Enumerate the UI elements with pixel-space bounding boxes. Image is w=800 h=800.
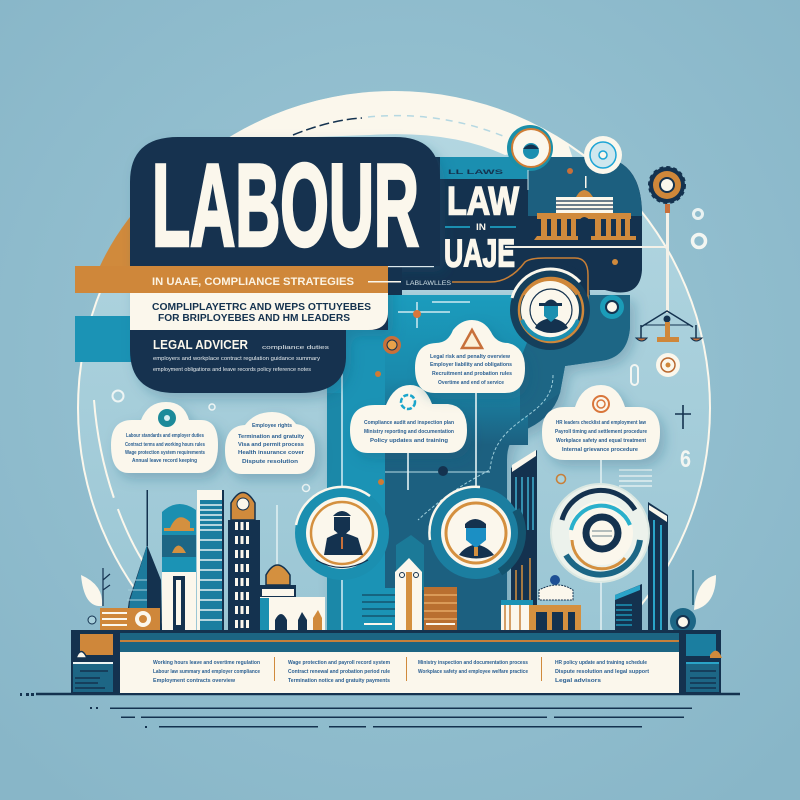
column one text: Employment contracts overview (153, 678, 235, 684)
title panel (75, 137, 440, 393)
medallion: officer top (510, 269, 590, 350)
callout text: Contract terms and working hours rules (125, 442, 205, 448)
mosque building (260, 565, 325, 630)
legal advice block: employment obligations and leave records policy reference notes (153, 367, 312, 373)
left orange block (76, 634, 113, 658)
legal advice block: employers and workplace contract regulation guidance summary (153, 356, 321, 362)
callout: centre: Ministry reporting and documentation (364, 429, 454, 435)
connector label: LABLAWLLES (406, 281, 451, 287)
LAW IN UAE heading: LL LAWS (448, 170, 503, 176)
domed tower (162, 504, 196, 630)
column three text: Ministry inspection and documentation process (418, 660, 528, 666)
connector label (368, 266, 451, 287)
callout: right (542, 385, 660, 460)
skyline left (81, 490, 325, 630)
legal advice block (153, 337, 330, 373)
large backdrop circle (77, 91, 711, 630)
white subtitle band: COMPLIPLAYETRC AND WEPS OTTUYEBES (152, 301, 371, 313)
callout: warning (415, 320, 525, 393)
icon: small target medallion (584, 136, 622, 174)
gear and plant (670, 570, 716, 634)
icon: teal gear (600, 295, 624, 319)
connector stems (277, 393, 601, 605)
column two text: Contract renewal and probation period rule (288, 669, 390, 675)
column one text: Labour law summary and employer compliance (153, 669, 260, 675)
orange box with ring (100, 608, 160, 630)
column four text: Dispute resolution and legal support (555, 669, 649, 675)
LAW IN UAE heading (444, 170, 519, 276)
panel extension (388, 266, 402, 295)
callout: centre: Policy updates and training (370, 438, 448, 444)
column two text: Wage protection and payroll record system (288, 660, 391, 666)
medium tower (615, 584, 642, 630)
small decorative icons right (112, 210, 706, 492)
strap text: IN UAAE, COMPLIANCE STRATEGIES (152, 276, 354, 288)
base line (36, 693, 740, 695)
LAW IN UAE heading: IN (476, 222, 486, 232)
striped tower (197, 490, 224, 630)
column three text: Workplace safety and employee welfare practice (418, 669, 528, 675)
callout text (125, 433, 205, 464)
icon: parliament building (534, 168, 636, 246)
callout text: Wage protection system requirements (125, 450, 205, 456)
medallion: gauge (551, 484, 649, 630)
central map shape (327, 157, 642, 630)
callout: warning: Recruitment and probation rules (432, 371, 512, 377)
icon: warning triangle (462, 330, 482, 348)
navy panel (130, 137, 440, 393)
column three text (418, 660, 528, 675)
white subtitle band (130, 293, 388, 330)
LAW IN UAE heading: UAJE (444, 232, 515, 276)
footer rules (20, 693, 692, 728)
orange side shape (100, 217, 130, 266)
bottom platform (71, 630, 722, 694)
small decorative icons right: 6 (680, 446, 691, 473)
callout: second left: Health insurance cover (238, 450, 304, 456)
teal side band (75, 316, 135, 362)
callout: right: HR leaders checklist and employment law (556, 420, 646, 426)
callout: right: Internal grievance procedure (562, 447, 638, 453)
callout: centre: Compliance audit and inspection plan (364, 420, 454, 426)
header band (120, 633, 679, 652)
left teal block (73, 662, 113, 692)
icon: top eye medallion (507, 125, 553, 190)
legal advice block: LEGAL ADVICER (153, 337, 249, 352)
callout: second left: Termination and gratuity (238, 434, 304, 440)
medallion: manager (295, 486, 389, 580)
icon: gear on pole with scales (636, 167, 702, 342)
text panel (120, 652, 679, 693)
main heading LABOUR: LABOUR (152, 140, 419, 270)
icon: orange gear badge (375, 302, 470, 377)
tall right tower (648, 502, 668, 630)
legal advice block: compliance duties (262, 345, 330, 351)
callout text: Labour standards and employer duties (126, 433, 204, 439)
connector line (505, 246, 668, 248)
column four text (555, 660, 649, 684)
column one text (153, 660, 260, 684)
icon: teal gear (158, 409, 176, 427)
callout: second left: Dispute resolution (242, 459, 298, 465)
column one text: Working hours leave and overtime regulation (153, 660, 260, 666)
column two text: Termination notice and gratuity payments (288, 678, 390, 684)
plant leaf left (81, 568, 110, 624)
callout: warning: Employer liability and obligations (430, 362, 512, 368)
column four text: HR policy update and training schedule (555, 660, 647, 666)
callout: centre (350, 385, 467, 453)
callout: second left: Visa and permit process (238, 442, 304, 448)
skyline centre (362, 558, 457, 630)
LAW IN UAE heading: LAW (447, 180, 519, 224)
callout: warning: Legal risk and penalty overview (430, 354, 510, 360)
right teal block (686, 634, 722, 692)
white subtitle band: FOR BRIPLOYEBES AND HM LEADERS (158, 312, 350, 324)
column two text (288, 660, 391, 684)
callout: second left (225, 412, 315, 474)
callout: right: Workplace safety and equal treatment (556, 438, 646, 444)
callout text: Annual leave record keeping (132, 458, 197, 464)
orange strap band (75, 266, 388, 293)
medallion: officer (429, 487, 522, 579)
callout: second left: Employee rights (252, 423, 292, 429)
tapered tower (125, 490, 162, 630)
callout: warning: Overtime and end of service (438, 380, 504, 386)
navy tower (511, 450, 537, 630)
callout: top left (111, 402, 218, 473)
skyline right (501, 450, 716, 634)
orange factory block (501, 575, 581, 630)
clock tower (228, 492, 260, 630)
column four text: Legal advisors (555, 678, 601, 684)
callout: right: Payroll timing and settlement procedure (555, 429, 647, 435)
